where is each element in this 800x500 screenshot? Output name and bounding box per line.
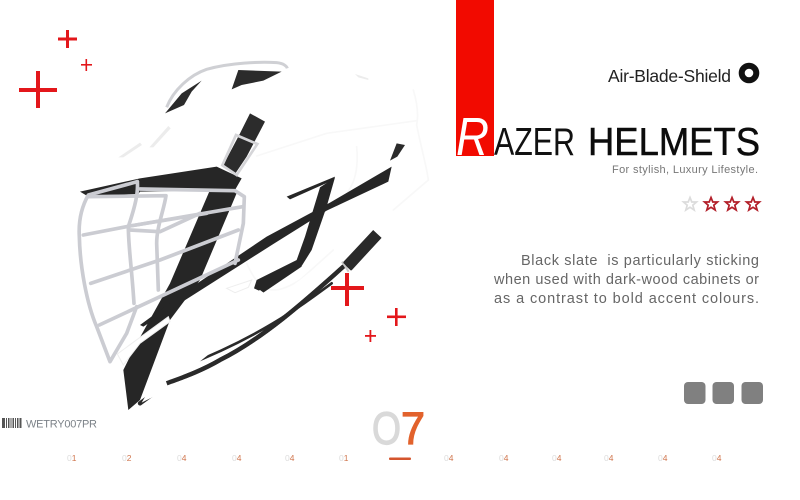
top strap xyxy=(223,113,265,174)
active page indicator xyxy=(389,458,411,460)
pagination numbers: 04 xyxy=(177,453,187,463)
lower white panels xyxy=(117,232,367,403)
pagination numbers: 04 xyxy=(232,453,242,463)
icon: ring xyxy=(742,66,756,80)
pagination numbers xyxy=(67,453,722,463)
pagination numbers: 04 xyxy=(604,453,614,463)
side window frame xyxy=(254,177,335,293)
three grey squares xyxy=(684,382,763,404)
pagination numbers: 04 xyxy=(444,453,454,463)
chin strap clips xyxy=(342,242,368,272)
chin straps xyxy=(140,234,377,403)
front slits xyxy=(118,74,368,157)
pagination numbers: 04 xyxy=(712,453,722,463)
page number 07: O xyxy=(372,403,401,454)
top vent rim xyxy=(167,62,287,107)
pagination numbers: 04 xyxy=(285,453,295,463)
red vertical bar xyxy=(456,0,494,156)
brow band xyxy=(80,167,242,196)
face cage xyxy=(79,182,244,362)
shell shading xyxy=(247,90,428,290)
title word: HELMETS: HELMETS xyxy=(588,121,760,164)
helmet shell xyxy=(80,62,428,410)
pagination numbers: 02 xyxy=(122,453,132,463)
tagline: For stylish, Luxury Lifestyle. xyxy=(612,164,758,176)
description paragraph xyxy=(493,253,759,307)
pagination numbers: 04 xyxy=(658,453,668,463)
stylized R: R xyxy=(456,107,489,167)
pagination numbers: 01 xyxy=(67,453,77,463)
helmet illustration xyxy=(79,62,428,410)
barcode icon xyxy=(2,418,22,428)
description paragraph: as a contrast to bold accent colours. xyxy=(494,291,759,307)
long diagonal band xyxy=(140,167,392,327)
page number 07: 7 xyxy=(401,403,425,454)
main diagonal strap xyxy=(123,188,237,410)
description paragraph: when used with dark-wood cabinets or xyxy=(493,272,759,288)
redraw straps over lower panel xyxy=(167,234,377,383)
pagination numbers: 04 xyxy=(499,453,509,463)
decorative red plus marks xyxy=(19,30,406,342)
title word: AZER: AZER xyxy=(494,121,575,164)
description paragraph: Black slate is particularly sticking xyxy=(521,253,759,269)
subtitle: Air-Blade-Shield: Air-Blade-Shield xyxy=(608,66,731,86)
title xyxy=(457,118,759,156)
product code: WETRY007PR xyxy=(26,418,97,430)
pagination numbers: 01 xyxy=(339,453,349,463)
strap loop xyxy=(222,135,257,175)
page number 07 xyxy=(372,403,425,454)
star rating xyxy=(684,198,760,210)
top vents xyxy=(165,70,405,161)
pagination numbers: 04 xyxy=(552,453,562,463)
